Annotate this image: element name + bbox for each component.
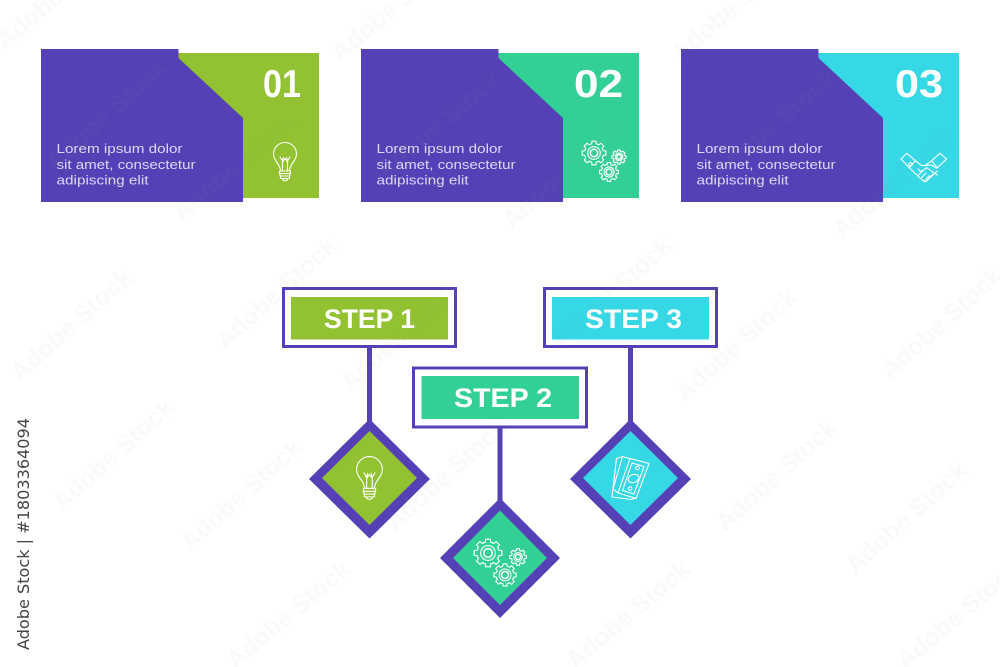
panel: step 3 <box>544 288 716 538</box>
cyan back panel <box>818 53 959 198</box>
connector stem <box>628 347 633 423</box>
card 01 text: Lorem ipsum dolor <box>56 141 183 156</box>
icon: handshake <box>901 153 947 182</box>
watermark pattern: Adobe Stock <box>47 393 180 516</box>
step 3 label box <box>544 288 716 346</box>
watermark pattern: Adobe Stock <box>175 433 308 556</box>
purple front panel <box>361 49 563 202</box>
icon: gears <box>582 141 626 181</box>
panel: step 2 <box>414 368 586 618</box>
watermark pattern: Adobe Stock <box>706 65 841 185</box>
diamond outer <box>440 498 560 618</box>
watermark pattern: Adobe Stock <box>335 273 468 396</box>
diamond outer <box>309 419 430 538</box>
watermark pattern: Adobe Stock <box>545 231 678 354</box>
number 01: 01 <box>263 63 301 106</box>
purple front panel <box>681 49 883 202</box>
step 1 label box <box>284 288 456 346</box>
icon: banknotes <box>612 456 649 500</box>
panel: card 03 <box>681 49 959 202</box>
step 3 label fill <box>552 297 709 340</box>
icon: lightbulb <box>357 457 382 499</box>
watermark pattern: Adobe Stock <box>371 65 506 185</box>
diamond inner <box>322 431 417 525</box>
stock id label: Adobe Stock | #1803364094 <box>14 418 33 650</box>
panel: card 02 <box>361 49 639 202</box>
watermark pattern: Adobe Stock <box>168 107 303 227</box>
card 02 text: adipiscing elit <box>376 172 469 188</box>
connector stem <box>367 347 372 423</box>
card 02 text: sit amet, consectetur <box>376 157 516 172</box>
number 03: 03 <box>895 63 943 106</box>
watermark pattern: Adobe Stock <box>827 121 960 244</box>
card 01 text <box>56 141 196 188</box>
step 2 label: STEP 2 <box>454 383 552 413</box>
diamond inner <box>583 431 678 525</box>
watermark pattern: Adobe Stock <box>840 456 973 579</box>
card 03 text: adipiscing elit <box>696 172 789 188</box>
card 03 text: sit amet, consectetur <box>696 157 836 172</box>
watermark pattern: Adobe Stock <box>670 283 803 406</box>
step 2 label fill <box>422 376 579 419</box>
connector stem <box>498 427 502 502</box>
step 1 label: STEP 1 <box>324 304 415 334</box>
card 01 text: adipiscing elit <box>56 172 149 188</box>
watermark pattern: Adobe Stock <box>497 111 630 234</box>
card 02 text: Lorem ipsum dolor <box>376 141 503 156</box>
panel: step 1 <box>284 288 456 538</box>
step 3 label: STEP 3 <box>585 304 682 334</box>
watermark pattern: Adobe Stock <box>40 53 173 176</box>
card 03 text: Lorem ipsum dolor <box>696 141 823 156</box>
card 03 text <box>696 141 836 188</box>
card 02 text <box>376 141 516 188</box>
step 1 label fill <box>291 297 448 340</box>
diamond outer <box>570 419 691 538</box>
icon: gears <box>474 539 526 586</box>
teal back panel <box>498 53 639 198</box>
diamond inner <box>453 510 547 605</box>
number 02: 02 <box>574 63 623 106</box>
green back panel <box>178 53 319 198</box>
card 01 text: sit amet, consectetur <box>56 157 196 172</box>
icon: lightbulb <box>274 142 296 181</box>
watermark pattern: Adobe Stock <box>5 263 138 386</box>
watermark pattern: Adobe Stock <box>380 413 513 536</box>
purple front panel <box>41 49 243 202</box>
panel: card 01 <box>41 49 319 202</box>
watermark pattern: Adobe Stock <box>710 413 843 536</box>
step 2 label box <box>414 368 586 427</box>
watermark pattern: Adobe Stock <box>210 231 343 354</box>
